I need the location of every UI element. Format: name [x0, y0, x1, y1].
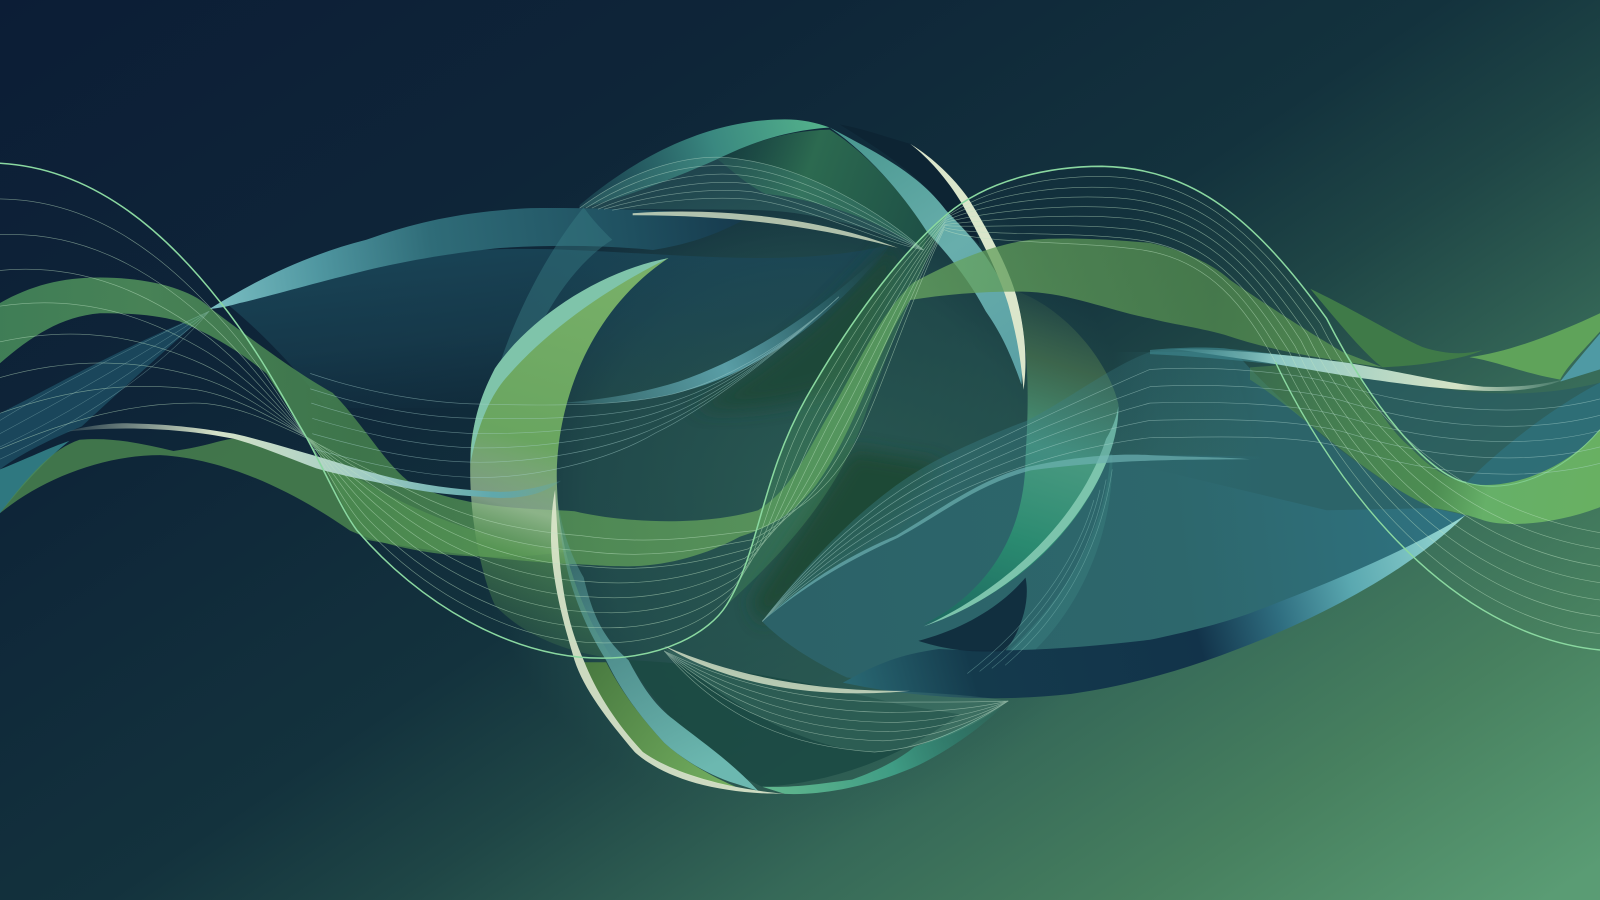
- central backdrop glow: [469, 153, 1143, 827]
- green crescent: [470, 258, 668, 658]
- fine line mesh: lower circle: [664, 651, 1008, 752]
- central leaf mesh fill: [727, 214, 947, 605]
- lower circle white highlight: [664, 646, 910, 693]
- blue ribbon, left mesh wedge: [0, 311, 209, 469]
- bright lower edge reaching the right margin: [1276, 362, 1600, 650]
- green wave lower left: [0, 439, 571, 557]
- bright green end right: [1469, 313, 1600, 380]
- fine line mesh: right circle lower: [967, 469, 1112, 673]
- white lower highlight: [551, 490, 785, 794]
- lower right bottom ribbon: [843, 515, 1465, 698]
- soft dark diagonal band upper: [694, 245, 900, 409]
- right lens fill: [762, 455, 1465, 679]
- thin lower lens ribbon: [559, 245, 890, 403]
- top mesh translucent lens: [580, 157, 923, 250]
- top arc white highlight: [910, 144, 1025, 390]
- white highlight wave, right: [1173, 349, 1566, 391]
- dark teal right of the pinch: [1350, 360, 1600, 485]
- blue ribbon, left solid section: [209, 208, 750, 309]
- left lens fill: [230, 245, 890, 408]
- soft dark diagonal band lower: [751, 449, 944, 623]
- top arc white sweep: [633, 211, 898, 248]
- teal wedge lower left: [0, 441, 69, 513]
- lower circle translucent mesh fill: [664, 648, 1008, 752]
- dark wedge under right circle: [918, 578, 1027, 652]
- fine line mesh: long green wave across the whole width: [0, 176, 1600, 643]
- lower circle ribbons: [557, 495, 1008, 794]
- main green ribbon: [0, 239, 1383, 566]
- top arc group: [580, 119, 1022, 385]
- fine line mesh: far left blue twist: [0, 311, 209, 459]
- bright edge of the long green wave: [0, 163, 1466, 658]
- darker green continuation right: [1310, 289, 1483, 367]
- upper right blue ribbon edge: [1150, 348, 1350, 376]
- centre right bright lower edge: [762, 455, 1250, 621]
- fine line mesh: top arc: [580, 157, 923, 250]
- left inner arc ribbon: [495, 207, 612, 388]
- blue patch on right edge: [1466, 383, 1600, 485]
- white highlight wave, left: [66, 423, 561, 498]
- right circle ribbon: [923, 291, 1119, 627]
- teal wedge right edge: [1560, 334, 1600, 382]
- fine line mesh: lower left lens: [310, 297, 839, 478]
- teal region above lens, fading left: [1112, 352, 1434, 510]
- green ribbon right lower: [1250, 360, 1600, 524]
- translucent right circle outer mesh: [980, 454, 1112, 676]
- bright top edge of the green ribbon at right: [1466, 430, 1600, 486]
- centre right translucent blue mesh: [762, 348, 1260, 621]
- fine line mesh: right blue wave: [762, 368, 1600, 621]
